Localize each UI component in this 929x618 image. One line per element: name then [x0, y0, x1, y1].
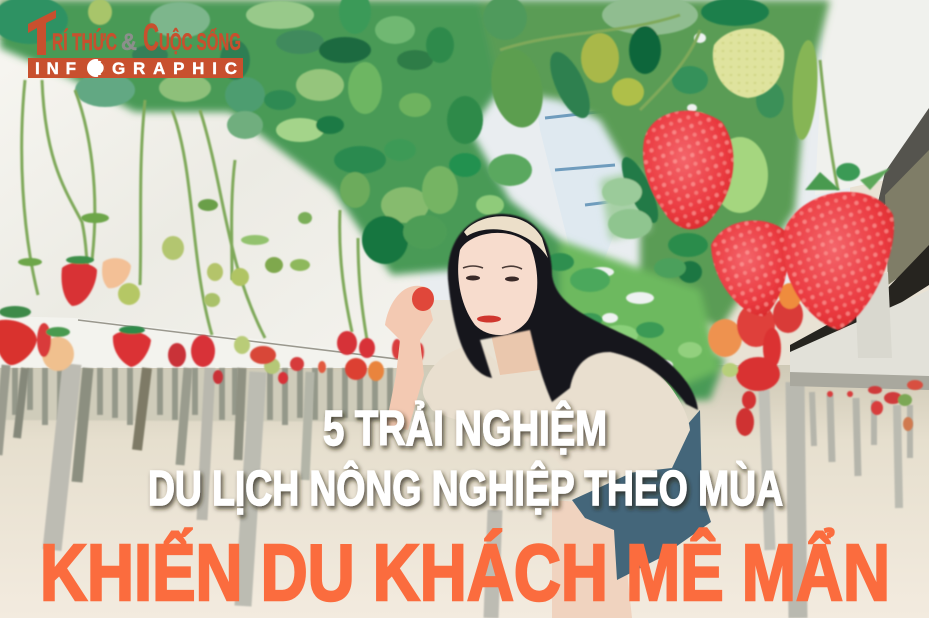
girl: eyes and brows [463, 266, 522, 282]
left white planter panel [0, 40, 420, 362]
left gutter shadow and white strip [0, 316, 420, 368]
back wall and greenhouse roof [400, 0, 850, 300]
logo [28, 10, 243, 78]
dense far floor rows [0, 368, 440, 425]
girl: face [458, 233, 537, 335]
small unripe berries and leaves on left vines [18, 0, 312, 374]
girl: arm and hand [385, 286, 433, 430]
strawberry leaves [0, 0, 820, 358]
girl: held strawberry [412, 287, 434, 311]
logo: masthead text: & [121, 29, 137, 56]
logo: infographic bar: GRAPHIC [112, 59, 237, 78]
logo: infographic bar [28, 58, 243, 78]
logo: masthead text: C [143, 17, 159, 59]
logo: masthead text [52, 17, 241, 59]
distant right strawberries [827, 380, 923, 431]
girl [385, 214, 711, 618]
title [40, 401, 890, 617]
right white planter panel [815, 0, 929, 195]
title: line 1: 5 TRẢI NGHIỆM [323, 401, 607, 456]
girl: neck [490, 320, 540, 375]
hanging vines [22, 15, 838, 340]
girl: blouse [423, 345, 690, 475]
logo: roof T mark [28, 10, 56, 55]
right dark trough [790, 108, 929, 358]
white gaps through foliage [590, 33, 706, 370]
unripe green strawberry [581, 28, 784, 106]
logo: infographic bar: INF [35, 59, 76, 78]
floor posts [0, 364, 910, 618]
right gutter beam and bracket [790, 272, 929, 390]
ripe strawberry cluster [643, 111, 894, 436]
left row strawberries [0, 256, 424, 384]
girl: hair [448, 214, 698, 410]
greenery mass [0, 0, 830, 400]
logo: masthead text: RÍ THỨC [52, 28, 117, 56]
floor [0, 365, 929, 618]
girl: headband [464, 216, 548, 258]
girl: legs [552, 500, 632, 618]
girl: lips [477, 316, 501, 322]
girl: denim skirt [572, 410, 711, 580]
logo: masthead text: UỘC SỐNG [159, 28, 241, 56]
